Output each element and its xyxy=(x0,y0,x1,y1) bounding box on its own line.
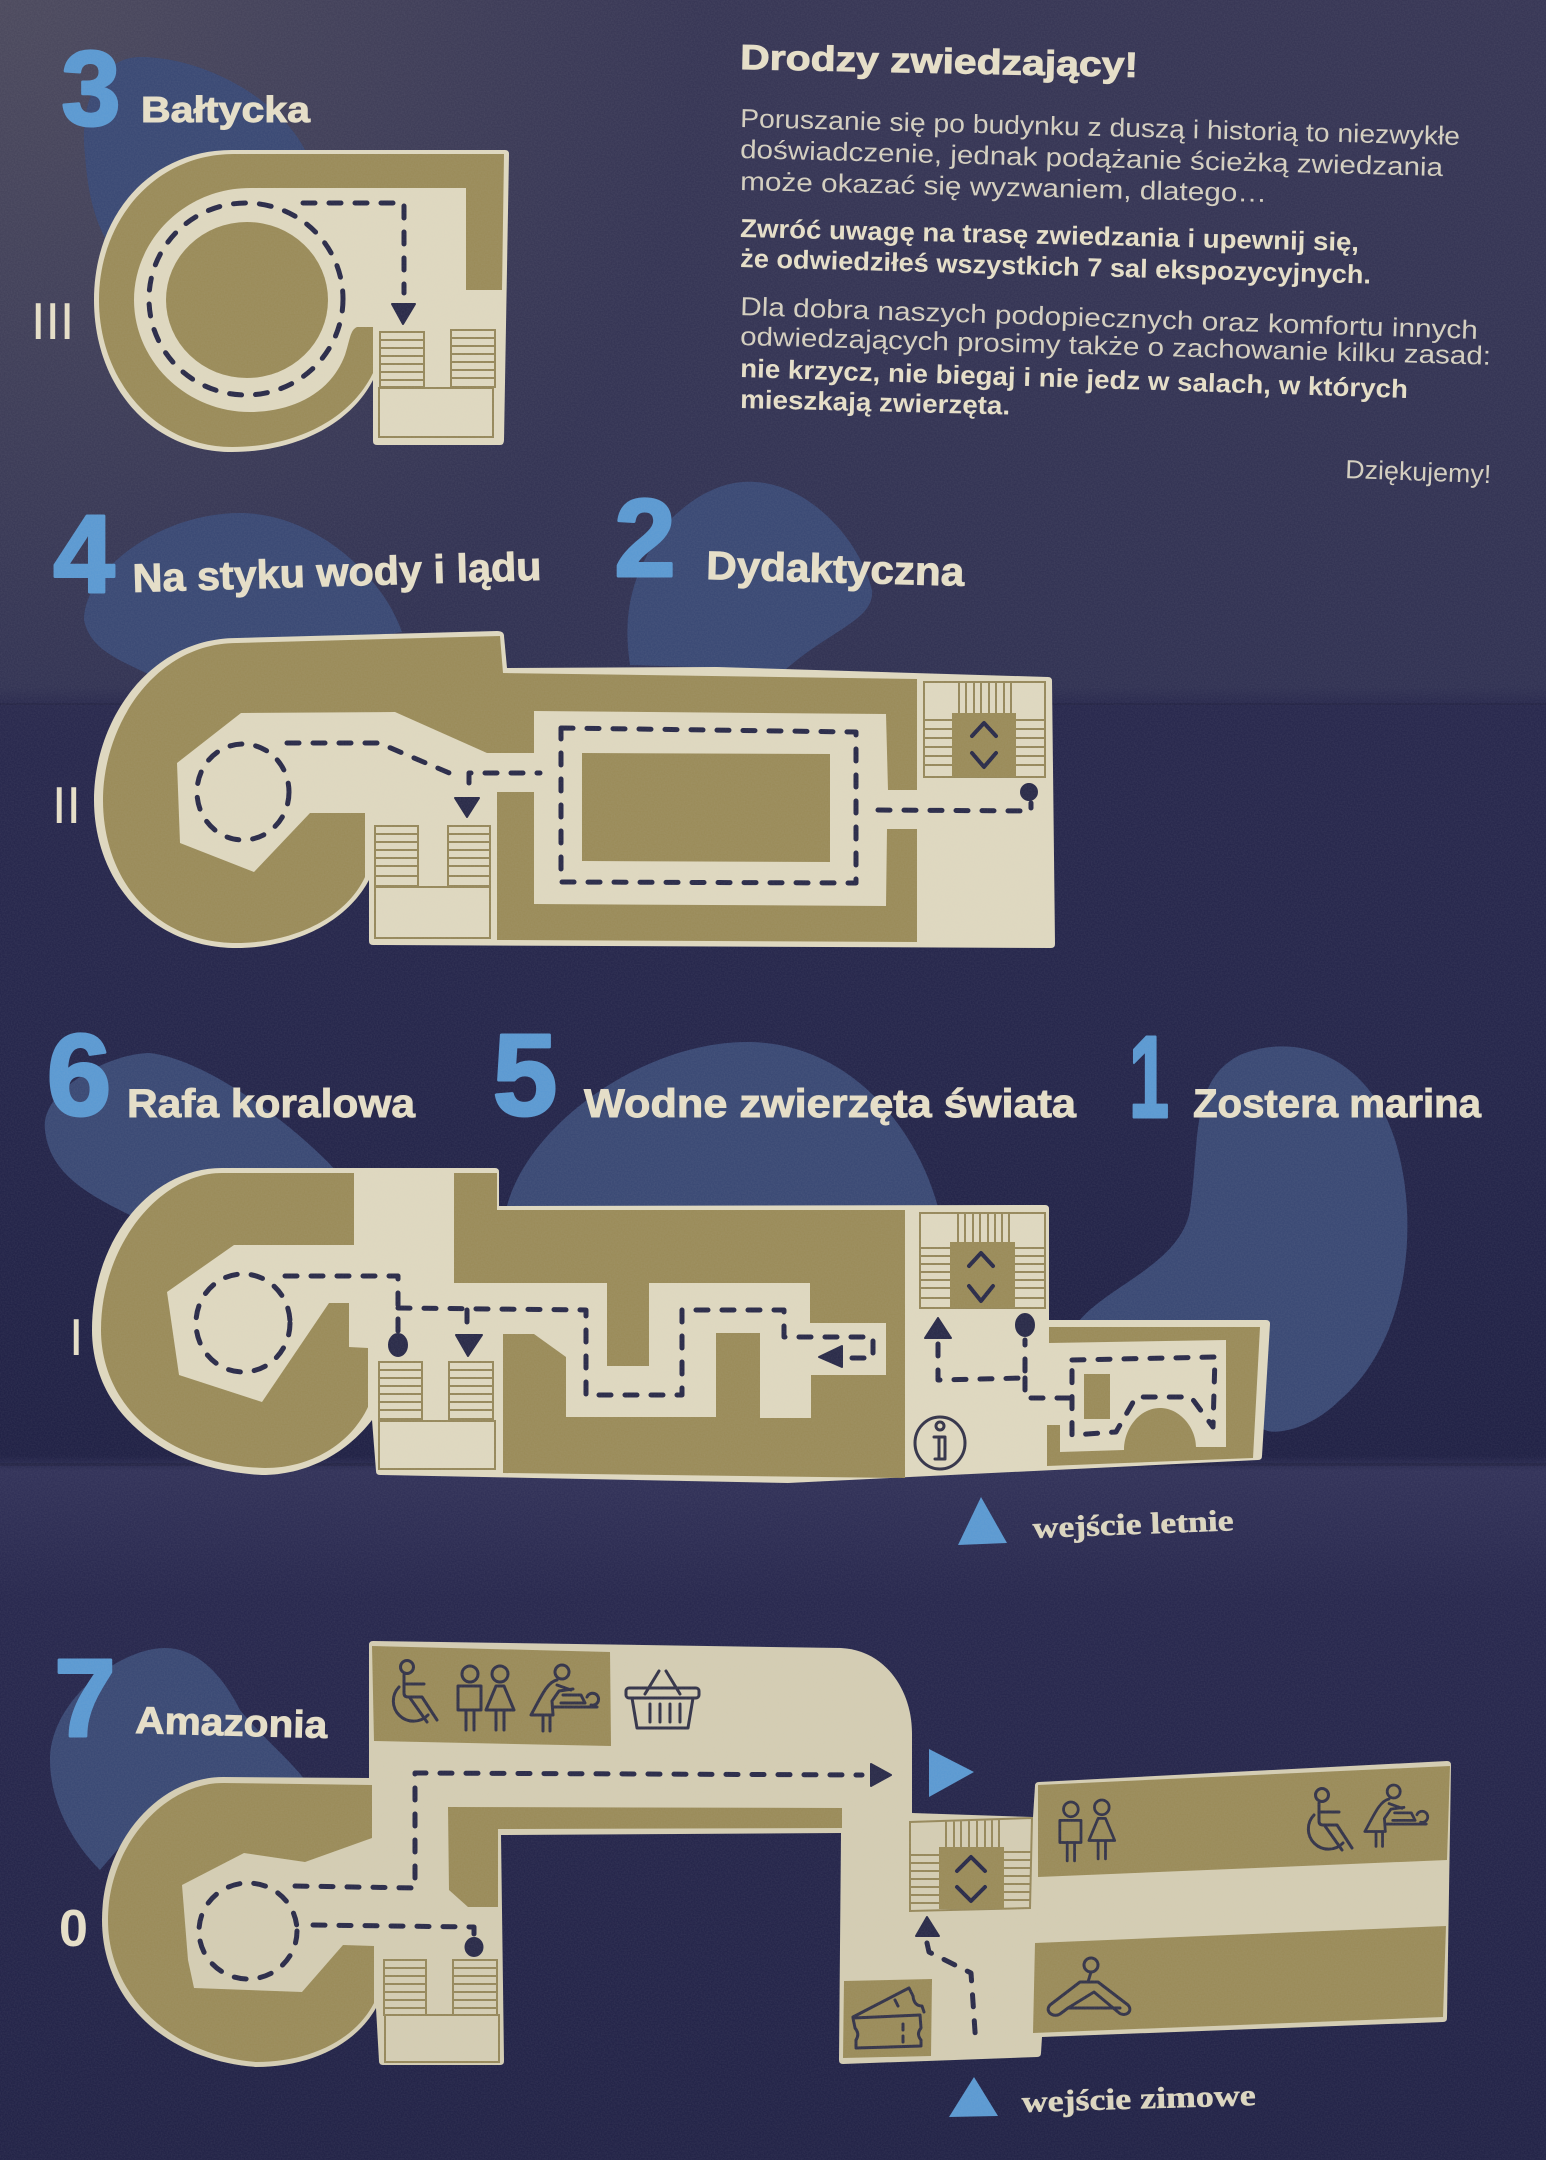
rules paragraph: mieszkają zwierzęta. xyxy=(740,384,1011,421)
intro heading: Drodzy zwiedzający! xyxy=(740,38,1139,85)
icon: information xyxy=(915,1417,965,1469)
heading: room 6: Rafa koralowa xyxy=(127,1082,416,1126)
blob: behind room 6 xyxy=(45,1053,340,1225)
bold notice: Zwróć uwagę na trasę zwiedzania i upewnij się, xyxy=(740,213,1359,257)
stairs xyxy=(379,1362,495,1469)
blob: behind room 7 xyxy=(50,1648,305,1870)
icon: baby changing xyxy=(1365,1785,1428,1846)
rules paragraph: odwiedzających prosimy także o zachowanie kilku zasad: xyxy=(740,321,1491,371)
floor plan: level III xyxy=(94,150,509,452)
icon: man xyxy=(1060,1802,1081,1861)
arrow: room 5 direction xyxy=(819,1346,842,1367)
heading: room 2 xyxy=(614,477,966,600)
central exhibit island xyxy=(582,753,830,862)
route xyxy=(197,728,1031,883)
intro paragraph: doświadczenie, jednak podążanie ścieżką zwiedzania xyxy=(740,134,1444,182)
right lower room xyxy=(1033,1926,1446,2033)
heading: room 4: Na styku wody i lądu xyxy=(132,545,542,601)
intro text block xyxy=(740,38,1492,489)
route start dot xyxy=(1016,1314,1034,1336)
heading: room 6 xyxy=(47,1010,416,1140)
arrow: route end xyxy=(392,304,415,324)
rules paragraph: nie krzycz, nie biegaj i nie jedz w salach, w których xyxy=(740,353,1408,404)
courtyard entrance arrow xyxy=(929,1749,974,1797)
floor plan: level 0 xyxy=(102,1641,1451,2067)
heading: room 3: Bałtycka xyxy=(141,89,311,130)
blob: behind room 5 xyxy=(505,1042,940,1215)
room 1 walls xyxy=(1047,1327,1260,1466)
bold notice: że odwiedziłeś wszystkich 7 sal ekspozycyjnych. xyxy=(740,243,1371,290)
icon: baby changing xyxy=(531,1665,599,1731)
arrow: route end xyxy=(455,798,479,817)
heading: room 2: 2 xyxy=(614,477,676,600)
icon: wheelchair xyxy=(1308,1788,1352,1850)
blob: behind room 3 xyxy=(84,57,305,260)
heading: room 6: 6 xyxy=(47,1010,111,1140)
arrow: route end xyxy=(456,1335,482,1356)
heading: room 5 xyxy=(493,1010,1077,1140)
intro paragraph xyxy=(740,103,1460,208)
stairs xyxy=(384,1960,499,2062)
floor label I: I xyxy=(69,1309,83,1367)
floor label II: II xyxy=(52,777,81,835)
summer entrance xyxy=(958,1497,1234,1545)
label: wejście zimowe xyxy=(1021,2079,1256,2119)
icon: entrance triangle xyxy=(949,2077,998,2117)
heading: room 3: 3 xyxy=(62,30,120,148)
stairs xyxy=(379,330,495,437)
blob: behind room 2 xyxy=(627,482,872,670)
intro paragraph: może okazać się wyzwaniem, dlatego… xyxy=(740,166,1267,208)
thanks: Dziękujemy! xyxy=(1345,454,1492,489)
intro paragraph: Poruszanie się po budynku z duszą i historią to niezwykłe xyxy=(740,103,1460,151)
icon: tickets xyxy=(853,1988,924,2048)
heading: room 7 xyxy=(54,1637,329,1760)
heading: room 7: 7 xyxy=(54,1637,116,1760)
floor label 0: 0 xyxy=(59,1900,88,1958)
arrow: route end xyxy=(871,1764,891,1786)
toilets panel xyxy=(372,1646,611,1746)
bold notice xyxy=(740,213,1371,290)
heading: room 5: Wodne zwierzęta świata xyxy=(584,1082,1077,1126)
corridor wall xyxy=(448,1807,842,1907)
heading: room 4: 4 xyxy=(53,493,115,616)
lift and stairs xyxy=(924,682,1045,777)
right upper room xyxy=(1038,1766,1450,1877)
route xyxy=(196,1274,1215,1435)
route start dot xyxy=(466,1938,482,1956)
lift and stairs xyxy=(910,1818,1032,1911)
heading: room 5: 5 xyxy=(493,1010,557,1140)
stairs xyxy=(375,826,490,938)
heading: room 1 xyxy=(1129,1014,1482,1142)
icon: woman xyxy=(486,1666,514,1730)
floor label III: III xyxy=(31,293,74,351)
floor plan: level II xyxy=(94,631,1055,948)
lift and stairs xyxy=(920,1213,1045,1308)
route xyxy=(199,1773,976,2046)
heading: room 1: Zostera marina xyxy=(1193,1082,1482,1126)
icon: shopping basket xyxy=(626,1671,699,1728)
icon: woman xyxy=(1089,1800,1115,1859)
floor plan: level I xyxy=(92,1168,1270,1483)
label: wejście letnie xyxy=(1032,1504,1234,1545)
heading: room 3 xyxy=(62,30,311,148)
icon: man xyxy=(458,1666,481,1730)
rules paragraph xyxy=(740,291,1491,421)
arrow: up to stairs xyxy=(925,1318,951,1338)
heading: room 2: Dydaktyczna xyxy=(706,544,966,595)
central exhibit island xyxy=(166,222,328,378)
heading: room 1: 1 xyxy=(1129,1014,1169,1142)
blob: behind room 4 xyxy=(84,513,402,675)
heading: room 4 xyxy=(53,493,542,616)
arrow: up to stairs xyxy=(916,1917,939,1936)
route dot xyxy=(389,1334,407,1356)
route xyxy=(149,203,404,395)
blob: behind room 1 xyxy=(1070,1046,1407,1432)
heading: room 7: Amazonia xyxy=(135,1700,329,1747)
route start dot xyxy=(1021,784,1037,800)
icon: hanger xyxy=(1048,1958,1130,2015)
rules paragraph: Dla dobra naszych podopiecznych oraz komfortu innych xyxy=(740,291,1478,345)
ticket office xyxy=(843,1979,932,2058)
winter entrance xyxy=(949,2077,1256,2119)
icon: entrance triangle xyxy=(958,1497,1007,1545)
icon: wheelchair xyxy=(393,1660,437,1722)
